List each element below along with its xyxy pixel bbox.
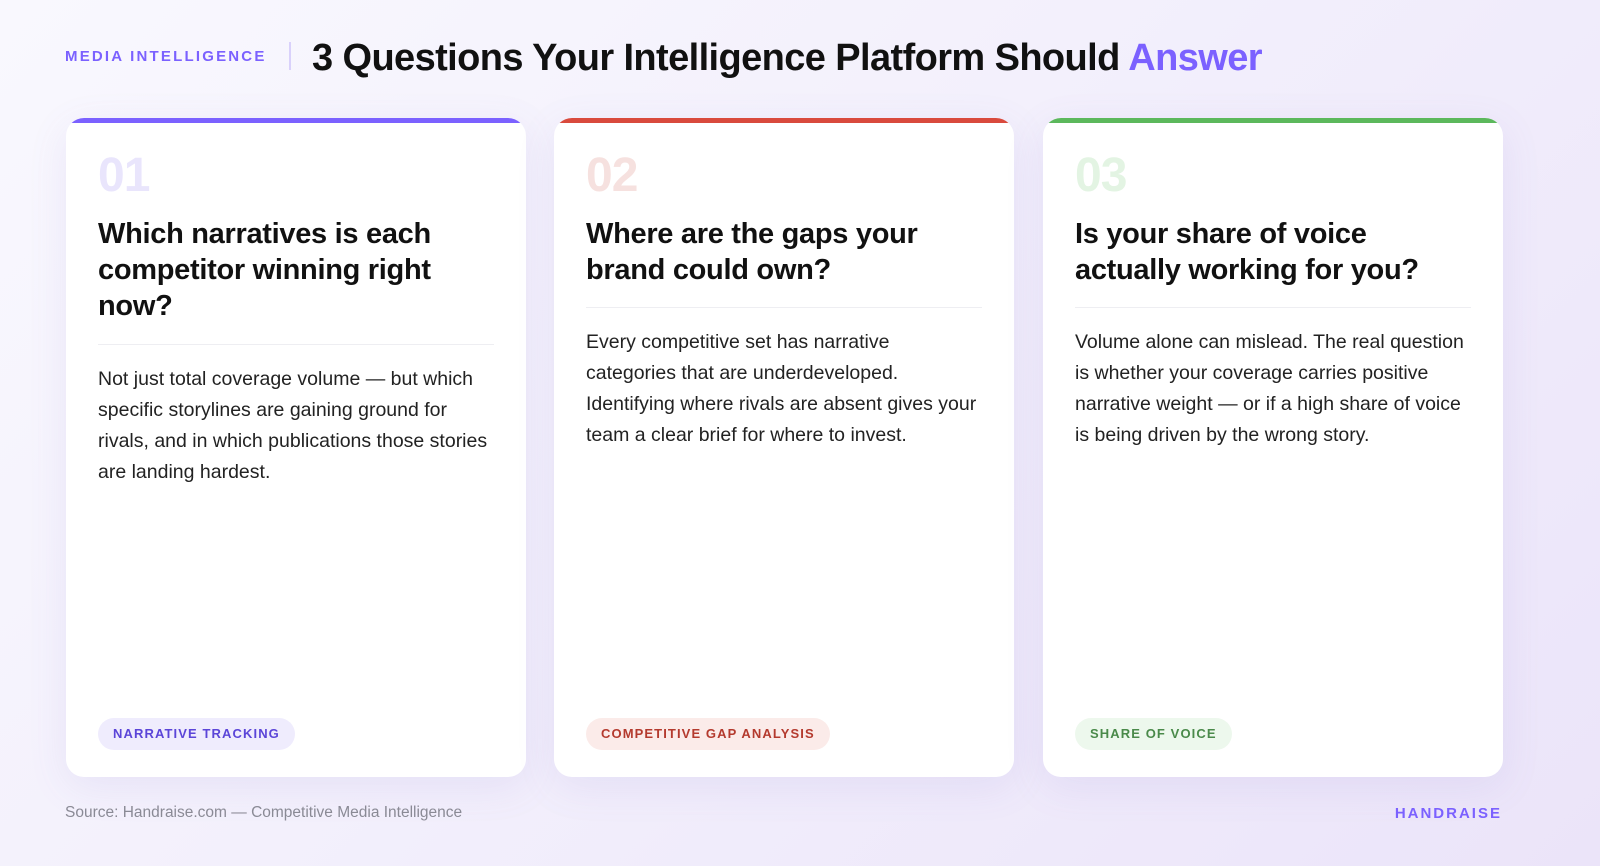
- body 1: rivals, and in which publications those stories: [98, 430, 487, 452]
- body 1: [98, 368, 487, 483]
- number 02: 02: [586, 149, 637, 202]
- panel: card 2: [554, 118, 1014, 777]
- heading 2: Where are the gaps your: [586, 218, 918, 250]
- body 3: [1075, 331, 1464, 446]
- heading 1: now?: [98, 290, 173, 322]
- heading 1: [98, 218, 431, 322]
- heading 3: [1075, 218, 1419, 286]
- body 1: specific storylines are gaining ground for: [98, 399, 447, 421]
- body 3: narrative weight — or if a high share of voice: [1075, 393, 1461, 415]
- panel: card 1: [66, 118, 526, 777]
- body 2: categories that are underdeveloped.: [586, 362, 898, 384]
- body 1: are landing hardest.: [98, 461, 270, 483]
- body 2: Identifying where rivals are absent gives your: [586, 393, 976, 415]
- body 3: is whether your coverage carries positive: [1075, 362, 1428, 384]
- body 2: team a clear brief for where to invest.: [586, 424, 907, 446]
- heading 3: Is your share of voice: [1075, 218, 1367, 250]
- tag 3: [1075, 718, 1232, 750]
- tag 2: [586, 718, 830, 750]
- tag 2: COMPETITIVE GAP ANALYSIS: [601, 726, 815, 741]
- tag 1: [98, 718, 295, 750]
- heading 1: Which narratives is each: [98, 218, 431, 250]
- body 2: [586, 331, 976, 446]
- body 3: is being driven by the wrong story.: [1075, 424, 1369, 446]
- tag 1: NARRATIVE TRACKING: [113, 726, 280, 741]
- source: Source: Handraise.com — Competitive Media Intelligence: [65, 804, 462, 821]
- brand: HANDRAISE: [1395, 805, 1502, 822]
- kicker: MEDIA INTELLIGENCE: [65, 48, 267, 65]
- title: 3 Questions Your Intelligence Platform Should Answer: [312, 37, 1262, 79]
- panel: card 3: [1043, 118, 1503, 777]
- heading 3: actually working for you?: [1075, 254, 1419, 286]
- tag 3: SHARE OF VOICE: [1090, 726, 1217, 741]
- heading 2: brand could own?: [586, 254, 831, 286]
- heading 1: competitor winning right: [98, 254, 431, 286]
- number 03: 03: [1075, 149, 1126, 202]
- number 01: 01: [98, 149, 149, 202]
- body 3: Volume alone can mislead. The real question: [1075, 331, 1464, 353]
- heading 2: [586, 218, 918, 286]
- body 1: Not just total coverage volume — but which: [98, 368, 473, 390]
- body 2: Every competitive set has narrative: [586, 331, 889, 353]
